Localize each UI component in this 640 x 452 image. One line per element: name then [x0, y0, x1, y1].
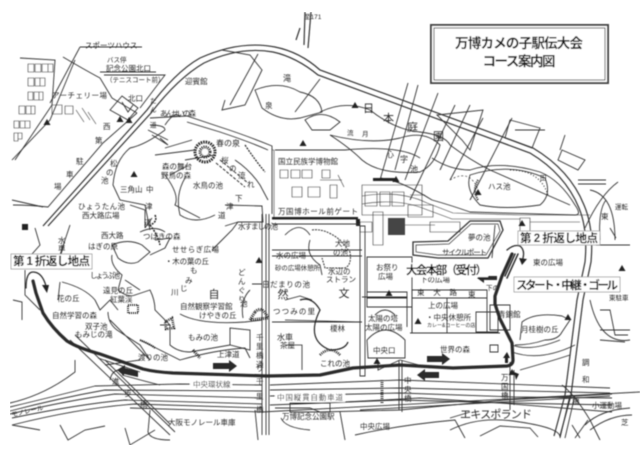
map place names: 芝	[621, 418, 629, 427]
map place names: 庭	[407, 120, 418, 134]
map place names: 東の広場	[533, 257, 563, 267]
map place names: 道	[150, 120, 157, 129]
inner park road network	[113, 50, 618, 240]
map place names: 東駐車	[609, 293, 629, 302]
map place names: 月桂樹の丘	[521, 324, 559, 334]
map place names: 野鳥の森	[161, 170, 191, 180]
map place names: もみの池	[188, 332, 218, 342]
map place names: 日だまりの池	[262, 279, 310, 289]
map place names: 道	[218, 210, 226, 220]
archery buildings	[14, 64, 96, 141]
map place names: アーチェリー場	[52, 90, 108, 100]
central pavilions block	[272, 150, 590, 245]
map place names: 中国縦貫自動車道	[277, 392, 344, 402]
map place names: しょうぶ池	[90, 270, 120, 280]
map place names: 中央環状線	[193, 379, 231, 389]
map place names: 砂の広場休憩所	[275, 263, 320, 272]
map place names: ぐ	[238, 286, 246, 295]
map place names: 津	[226, 202, 234, 211]
map place names: 春の泉	[216, 138, 240, 148]
map place names: 然	[278, 287, 288, 301]
map place names: 泉	[265, 100, 273, 110]
map place names: 太陽の広場	[365, 322, 403, 332]
map place names: （テニスコート前）	[106, 75, 164, 84]
map place names: エキスポランド	[460, 408, 532, 421]
map place names: り	[238, 295, 246, 304]
map place names: 津	[145, 202, 153, 211]
arrow: return left (east section)	[417, 369, 439, 381]
dark building marks and walls	[22, 178, 405, 235]
map place names: 水	[58, 235, 66, 245]
label: first turnaround point: 第 1 折返し地点	[13, 254, 90, 268]
highways and monorail band	[10, 214, 640, 445]
map place names: 記念公園北口	[106, 64, 151, 73]
map place names: 文	[338, 286, 350, 300]
map place names: 園	[433, 130, 444, 143]
tree markers	[44, 102, 626, 375]
map place names: も	[190, 266, 198, 275]
map place names: 駐	[76, 156, 84, 166]
map place names: 北口	[128, 94, 143, 103]
title line 2: コース案内図	[482, 53, 556, 69]
map place names: 花の丘	[57, 293, 80, 303]
map place names: スポーツハウス	[85, 41, 137, 50]
map place names: ん	[150, 106, 157, 114]
map place names: 西大路	[101, 230, 124, 240]
map place names: 国立民族学博物館	[278, 156, 338, 166]
map place names: あんせいの森	[160, 108, 196, 118]
map place names: 西	[103, 122, 111, 131]
map place names: 進	[112, 376, 120, 386]
map place names: 双子池	[85, 321, 108, 331]
map place names: 大地	[335, 238, 350, 248]
map place names: つつみの里	[273, 307, 316, 316]
map place names: 水鳥の池	[193, 180, 223, 190]
map place names: 広場	[378, 271, 393, 281]
map place names: 池	[240, 298, 248, 308]
map place names: 池	[410, 164, 418, 174]
map place names: 榎林	[330, 323, 345, 333]
map place names: 桜	[221, 155, 229, 165]
running course route	[26, 246, 524, 376]
map place names: 水車	[277, 332, 293, 342]
map place names: た	[150, 97, 156, 105]
label: race headquarters: 大会本部（受付）	[406, 263, 487, 277]
dream pond boundary	[312, 221, 503, 268]
map place names: サイクルポート	[442, 248, 487, 257]
map place names: 滝	[283, 73, 291, 83]
dense wooded detail	[128, 142, 548, 370]
map place names: 橋	[572, 396, 580, 406]
map place names: 調	[582, 358, 590, 367]
map place names: 字	[400, 155, 408, 164]
map place names: 遠見の丘	[103, 285, 133, 295]
map place names: じ	[180, 284, 188, 293]
map place names: せせらぎ広場	[172, 244, 220, 254]
map place names: 上津道	[217, 349, 240, 359]
map place names: 池	[101, 175, 109, 185]
map place names: 道	[144, 217, 152, 227]
map place names: 橋	[256, 350, 264, 360]
map place names: 夢の池	[468, 232, 491, 242]
arrow: to headquarters	[477, 273, 497, 283]
map place names: 千	[256, 376, 264, 386]
map place names: 場	[54, 181, 62, 191]
south-central plazas	[272, 224, 630, 440]
map place names: 至171	[304, 13, 322, 21]
map place names: 大阪モノレール車庫	[168, 417, 236, 427]
label: start relay goal: スタート・中継・ゴール	[516, 278, 618, 292]
map place names: 第	[95, 135, 103, 145]
map place names: 運転	[615, 202, 628, 211]
map place names: の	[229, 164, 236, 173]
map place names: もみじの滝	[75, 329, 113, 339]
map place names: 車	[66, 169, 74, 179]
map place names: 自	[208, 288, 220, 301]
map place names: 自然観察学習館	[180, 301, 233, 311]
map place names: の	[106, 168, 114, 177]
map place names: 央	[404, 384, 412, 394]
map place names: 東大路	[417, 287, 458, 297]
map place names: 橋	[404, 393, 412, 403]
map place names: つばきの森	[143, 231, 181, 241]
map place names: 橋	[140, 399, 148, 409]
map place names: お祭り	[376, 262, 398, 272]
map place names: 中央口	[373, 345, 396, 355]
map place names: 心	[386, 149, 394, 159]
map place names: ん	[238, 277, 246, 286]
map place names: ストラン	[326, 275, 356, 284]
west park ponds and paths	[13, 115, 268, 385]
map place names: これの池	[320, 358, 350, 368]
map place names: 本	[383, 111, 394, 125]
map place names: 太陽の塔	[368, 313, 398, 323]
map place names: 車	[58, 243, 66, 253]
map place names: ・木の葉の丘	[165, 256, 210, 266]
map place names: けやきの丘	[199, 311, 237, 320]
map place names: ひょうたん池	[78, 201, 126, 211]
map place names: 下の広場	[420, 274, 450, 284]
title box	[431, 25, 608, 83]
map place names: モノレール	[11, 404, 45, 419]
map place names: の池	[333, 247, 348, 257]
map place names: 日	[363, 103, 374, 115]
map place names: 自然学習の森	[52, 310, 98, 320]
arrow: outbound right (east section)	[427, 353, 450, 365]
map place names: 三角山	[120, 184, 142, 194]
map place names: 迎賓館	[185, 76, 208, 86]
map place names: バス停	[107, 55, 127, 64]
map place names: 下	[235, 194, 243, 203]
map place names: 流	[238, 170, 246, 180]
map place names: 川	[171, 288, 178, 297]
map place names: 水辺の	[328, 266, 350, 276]
label: second turnaround point: 第 2 折返し地点	[520, 231, 598, 245]
map place names: 万博記念公園駅	[282, 411, 335, 421]
map place names: 歩	[124, 388, 132, 398]
north-west roads and parking	[12, 47, 165, 207]
map place names: 水の広場	[276, 250, 306, 260]
map place names: 万	[501, 373, 509, 382]
map place names: 松	[110, 158, 118, 168]
map place names: り	[256, 364, 264, 373]
map place names: 田	[540, 174, 546, 182]
map place names: 里	[256, 342, 264, 351]
map place names: 渡りの池	[138, 352, 168, 362]
map place names: 中央広場	[360, 421, 390, 431]
map place names: 橋	[501, 390, 509, 400]
map place names: 和	[582, 375, 590, 384]
arrow: return left (west section)	[117, 365, 138, 377]
map place names: 世界の森	[440, 344, 470, 354]
map place names: 国	[501, 382, 508, 391]
map place names: 東	[468, 289, 476, 299]
map place names: 千	[256, 332, 264, 342]
map place names: 下の	[486, 284, 499, 292]
map place names: ハス池	[488, 181, 511, 191]
map place names: 里	[256, 392, 264, 401]
map place names: 中	[146, 184, 154, 194]
map place names: 水すましの池	[238, 221, 278, 231]
arrow: outbound right (west section)	[213, 360, 237, 372]
turnaround arrowheads and small arrows	[42, 258, 527, 380]
map place names: ど	[238, 268, 246, 277]
map place names: み	[185, 276, 193, 285]
map place names: 森の舞台	[162, 161, 192, 171]
map place names: れ	[247, 180, 255, 189]
map place names: 通	[256, 359, 264, 369]
map place names: 西大路広場	[82, 210, 120, 220]
map place names: 橋	[256, 404, 264, 414]
map place names: 万国博ホール前ゲート	[278, 206, 358, 216]
map place names: はぎの原	[88, 241, 118, 251]
map place names: ・中央休憩所	[426, 312, 471, 322]
map place names: 小運動場	[592, 400, 622, 410]
map place names: 中	[404, 375, 412, 385]
title line 1: 万博カメの子駅伝大会	[455, 35, 584, 51]
map place names: 流	[347, 128, 354, 137]
map place names: 青銅館	[498, 309, 521, 319]
map place names: 茶屋	[280, 340, 295, 350]
map place names: 月	[362, 130, 368, 138]
map place names: 東	[601, 211, 609, 221]
map place names: カレー&コーヒーの店	[427, 323, 475, 329]
direction arrows	[117, 273, 497, 381]
map place names: 紅葉渓	[110, 294, 133, 304]
map place names: 上の広場	[428, 300, 458, 310]
